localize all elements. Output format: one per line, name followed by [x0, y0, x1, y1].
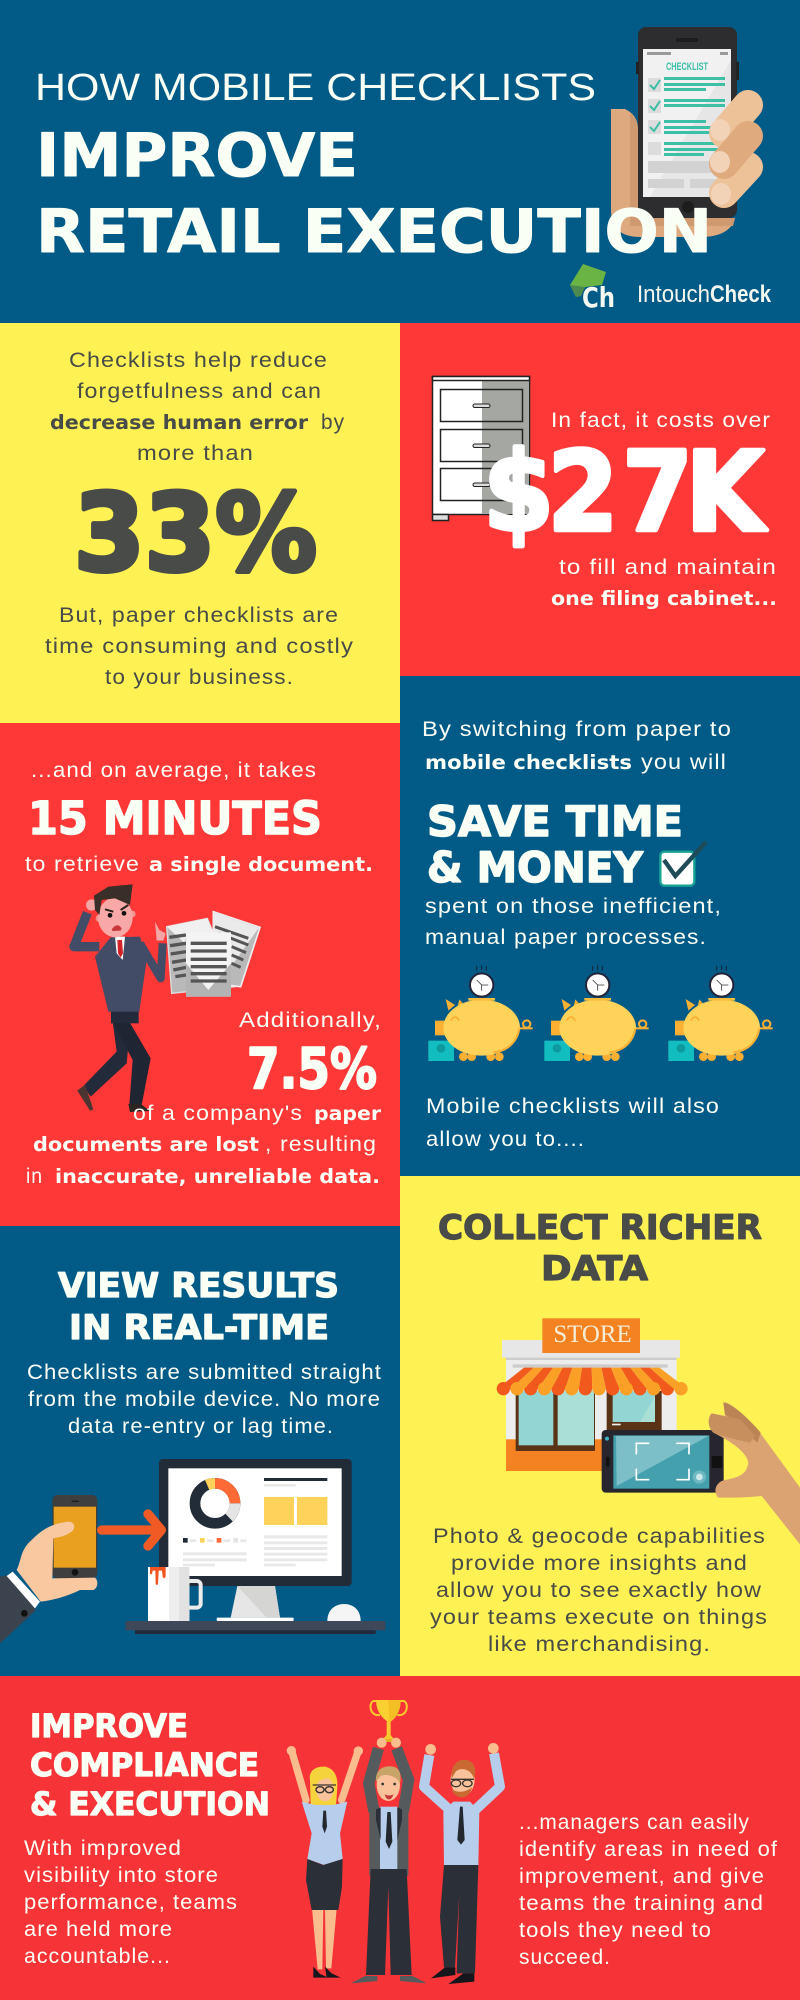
heading: collect richer data: COLLECT RICHER [438, 1208, 762, 1248]
panel: 15 minutes [0, 723, 400, 1226]
text: submitted straight: from the mobile device. No more [28, 1388, 381, 1411]
icon: hand holding phone with checklist [611, 27, 748, 237]
text: photo and geocode: allow you to see exactly how [436, 1579, 762, 1602]
text: paper checklists: But, paper checklists are [59, 604, 339, 627]
panel: save time and money [400, 676, 800, 1176]
title: RETAIL EXECUTION [36, 197, 712, 267]
text: managers can identify: identify areas in need of [519, 1838, 778, 1861]
panel: collect richer data [400, 1176, 800, 1676]
text: checklists help: decrease human error [50, 411, 308, 434]
panel: header [0, 0, 800, 323]
text: submitted straight: data re-entry or lag time. [68, 1415, 334, 1438]
heading: collect richer data: DATA [541, 1249, 649, 1289]
text: managers can identify: improvement, and give [519, 1865, 765, 1888]
illustration: team with trophy [287, 1700, 500, 1984]
text: managers can identify [519, 1811, 778, 1969]
text: checklists help: more than [137, 442, 254, 465]
heading: view results: VIEW RESULTS [58, 1266, 339, 1306]
text: single document [25, 853, 373, 876]
text: documents lost: inaccurate, unreliable data. [55, 1165, 380, 1188]
text: documents lost: in [26, 1165, 43, 1188]
text: fill and maintain: to fill and maintain [559, 556, 777, 579]
logo: IntouchCheck: Check [710, 281, 772, 308]
text: paper checklists: time consuming and costly [45, 635, 354, 658]
text: will also allow [426, 1095, 720, 1151]
text: checklists help: forgetfulness and can [77, 380, 322, 403]
icon: trophy [371, 1700, 407, 1742]
text: documents lost [26, 1102, 381, 1188]
text: photo and geocode: provide more insights and [451, 1552, 748, 1575]
title [35, 67, 712, 267]
heading: improve compliance: COMPLIANCE [30, 1746, 259, 1784]
text: photo and geocode: like merchandising. [488, 1633, 711, 1656]
text: fill and maintain: one filing cabinet... [551, 587, 777, 610]
panel: improve compliance and execution [0, 1676, 800, 2000]
text: in fact: In fact, it costs over [551, 409, 771, 432]
panel: view results in real-time [0, 1226, 400, 1676]
text: improved visibility: visibility into store [24, 1864, 219, 1887]
text: additionally: Additionally, [239, 1009, 382, 1032]
illustration: store and camera phone [497, 1318, 800, 1544]
statistic: 33%: 33% [74, 472, 317, 595]
text: photo and geocode [430, 1525, 768, 1656]
text: managers can identify: tools they need to [519, 1919, 712, 1942]
panel: decrease human error [0, 323, 400, 723]
person: man with jacket [351, 1738, 427, 1983]
text: managers can identify: ...managers can easily [519, 1811, 750, 1834]
text: fill and maintain [551, 556, 777, 610]
text: documents lost: documents are lost [33, 1133, 259, 1156]
text: improved visibility: performance, teams [24, 1891, 238, 1914]
icon: checkbox [660, 842, 706, 886]
statistic: 7.5%: 7.5% [247, 1037, 377, 1102]
text: switching: you will [641, 751, 727, 774]
heading: improve compliance [30, 1707, 270, 1823]
heading: view results [58, 1266, 339, 1348]
text: documents lost: of a company's [133, 1102, 303, 1125]
heading: collect richer data [438, 1208, 762, 1289]
text: on average: ...and on average, it takes [31, 759, 317, 782]
text: will also allow: Mobile checklists will also [426, 1095, 720, 1118]
icon: three piggy banks [428, 965, 773, 1061]
text: submitted straight [27, 1361, 382, 1438]
person: woman [287, 1746, 363, 1978]
text: managers can identify: teams the training and [519, 1892, 764, 1915]
text: photo and geocode: Photo & geocode capabilities [433, 1525, 766, 1548]
text: photo and geocode: your teams execute on things [430, 1606, 768, 1629]
heading: save time and money: & MONEY [427, 843, 644, 892]
text: documents lost: paper [314, 1102, 381, 1125]
heading: save time and money [427, 797, 683, 892]
text: improved visibility [24, 1837, 238, 1968]
text: checklists help [50, 349, 345, 465]
heading: improve compliance: & EXECUTION [30, 1785, 270, 1823]
text: checklists help: by [321, 411, 345, 434]
text: inefficient processes: spent on those inefficient, [425, 895, 722, 918]
heading: view results: IN REAL-TIME [69, 1308, 329, 1348]
text: documents lost: , resulting [265, 1133, 377, 1156]
text: inefficient processes [425, 895, 722, 949]
text: inefficient processes: manual paper processes. [425, 926, 707, 949]
icon: filing cabinet [432, 376, 530, 520]
text: checklists help: Checklists help reduce [69, 349, 328, 372]
illustration: phone to desktop [0, 1459, 385, 1643]
illustration: store and camera phone: STORE [553, 1320, 632, 1348]
statistic: $27K: $27K [483, 428, 768, 556]
text: switching: mobile checklists [425, 751, 632, 774]
text: improved visibility: With improved [24, 1837, 182, 1860]
person: man with beard [424, 1743, 500, 1984]
text: improved visibility: are held more [24, 1918, 173, 1941]
text: managers can identify: succeed. [519, 1946, 611, 1969]
panel: filing cabinet cost [400, 323, 800, 676]
logo: IntouchCheck: Ch [582, 281, 615, 314]
text: switching: By switching from paper to [422, 718, 732, 741]
text: improved visibility: accountable... [24, 1945, 171, 1968]
text: single document: to retrieve [25, 853, 140, 876]
text: will also allow: allow you to.... [426, 1128, 585, 1151]
logo: IntouchCheck [570, 264, 772, 314]
text: paper checklists: to your business. [105, 666, 294, 689]
text: single document: a single document. [149, 853, 373, 876]
title: HOW MOBILE CHECKLISTS [35, 67, 596, 109]
heading: improve compliance: IMPROVE [30, 1707, 188, 1745]
icon: hand holding phone with checklist: CHECKLIST [666, 61, 708, 73]
statistic: 15 minutes: 15 MINUTES [28, 792, 322, 845]
heading: save time and money: SAVE TIME [427, 797, 683, 846]
text: paper checklists [45, 604, 354, 689]
text: submitted straight: Checklists are submitted straight [27, 1361, 382, 1384]
title: IMPROVE [36, 121, 358, 191]
icon: stressed man with papers [74, 884, 260, 1112]
text: switching [422, 718, 732, 774]
logo: IntouchCheck: Intouch [637, 281, 710, 308]
